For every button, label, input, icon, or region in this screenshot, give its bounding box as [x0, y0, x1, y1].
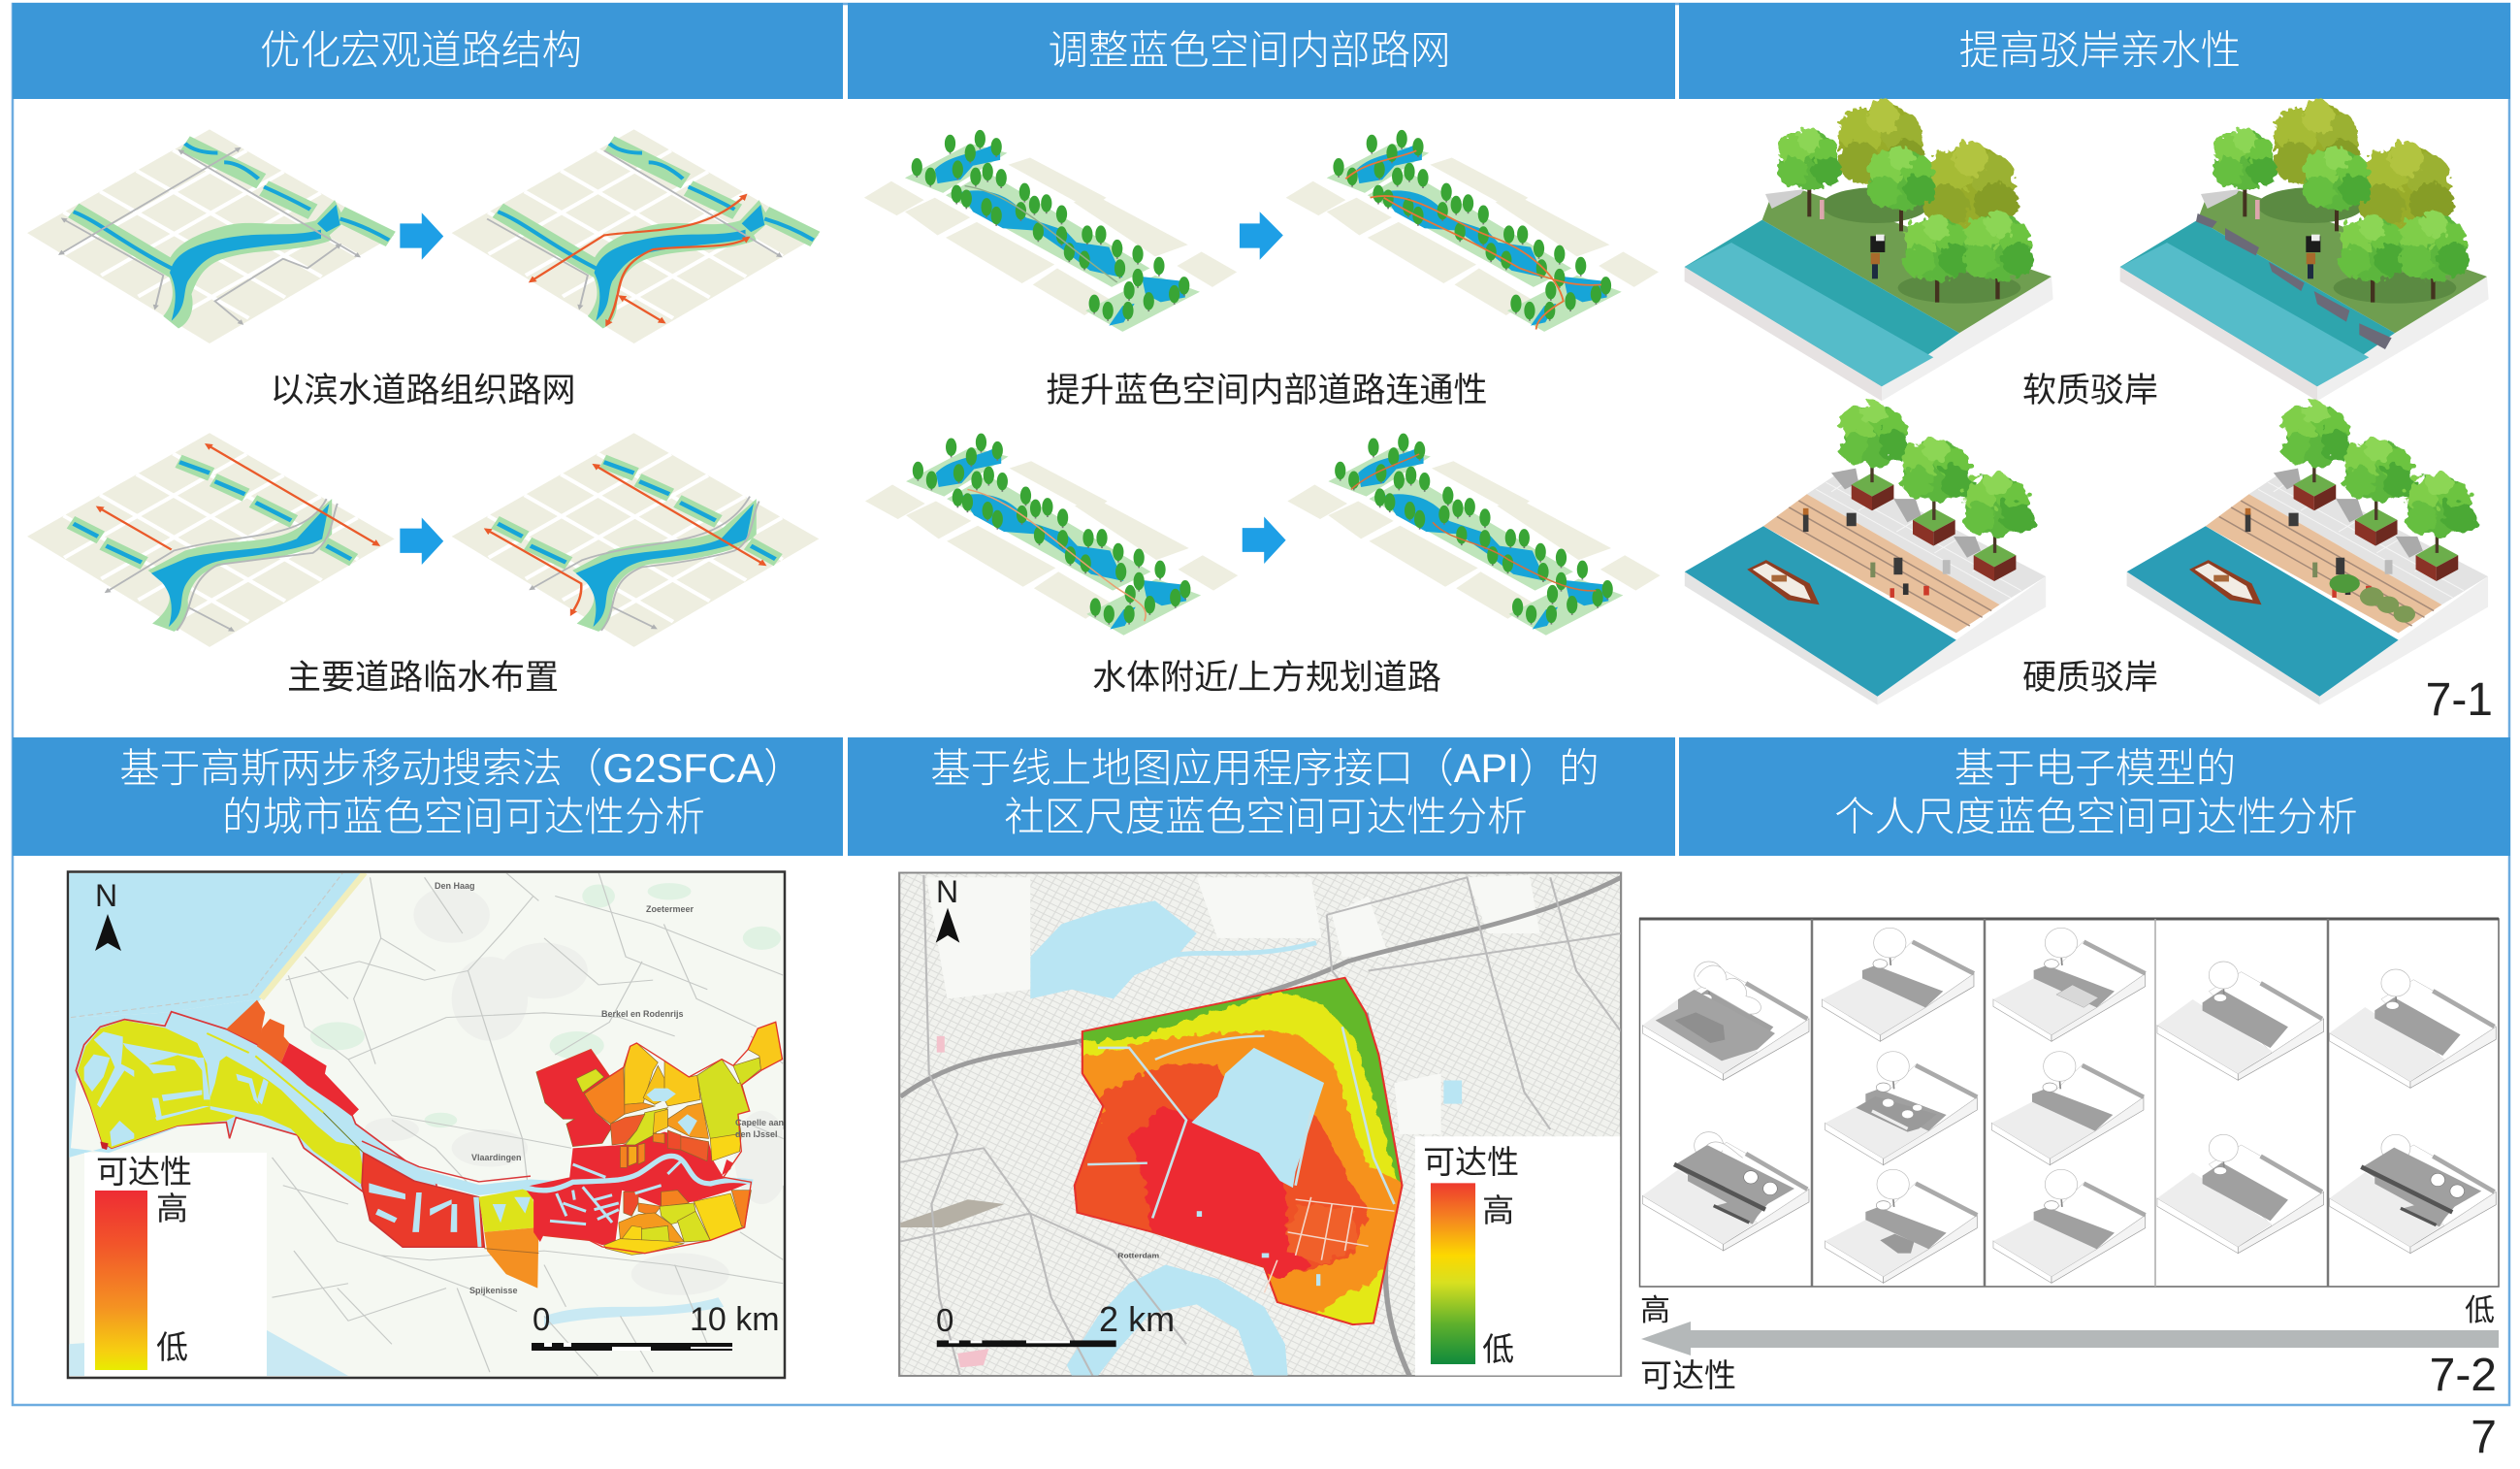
header: 高斯两步移动搜索法: 的城市蓝色空间可达性分析: [222, 794, 705, 839]
legend: accessibility: [84, 1153, 267, 1376]
map base: water and highways: [900, 875, 1621, 1377]
figure number 7-1: 7-1: [2426, 674, 2493, 726]
header: 线上地图应用程序接口: 基于线上地图应用程序接口（API）的: [930, 745, 1599, 791]
panel: personal scale typologies: [1642, 928, 2496, 1283]
column 2 blocks: [1822, 928, 1977, 1283]
arrow: [1243, 517, 1286, 564]
legend: accessibility: 可达性: [1423, 1144, 1519, 1180]
label: low: 低: [2465, 1293, 2495, 1327]
diagram: soft bank before: [1685, 99, 2053, 401]
header: 优化宏观道路结构: [13, 3, 843, 99]
legend: accessibility: 高: [156, 1191, 188, 1226]
north arrow: [95, 878, 121, 951]
legend: accessibility: 低: [1482, 1331, 1514, 1367]
scale bar: 0: [533, 1301, 550, 1337]
header: 优化宏观道路结构: 优化宏观道路结构: [260, 27, 582, 73]
map: city scale accessibility: [68, 871, 789, 1378]
map labels: Spijkenisse: [469, 1286, 518, 1295]
arrow: [400, 212, 443, 260]
arrow: accessibility direction: [1641, 1322, 2499, 1355]
diagram: park connectivity after: [1286, 130, 1659, 332]
north arrow: N: [95, 878, 117, 913]
north arrow: N: [936, 874, 958, 909]
region outline, lake and canals: [1075, 978, 1402, 1324]
caption: 水体附近/上方规划道路: [1092, 659, 1441, 697]
label: high: 高: [1640, 1293, 1670, 1327]
scale bar: 0: [936, 1302, 953, 1338]
legend: accessibility: 低: [156, 1329, 188, 1365]
column 5 blocks: [2330, 969, 2496, 1254]
arrow: [1240, 212, 1283, 260]
label: accessibility: 可达性: [1640, 1357, 1736, 1393]
header: 电子模型: [1679, 737, 2510, 856]
header: 提高驳岸亲水性: [1679, 3, 2510, 99]
header: 高斯两步移动搜索法: [13, 737, 843, 856]
map labels: Zoetermeer: [646, 904, 695, 914]
map labels: den IJssel: [735, 1129, 778, 1139]
column 3 blocks: [1991, 928, 2146, 1283]
map labels: Den Haag: [435, 881, 475, 891]
diagram: main road near water after: [452, 433, 819, 647]
caption: 主要道路临水布置: [287, 659, 559, 697]
header: 线上地图应用程序接口: 社区尺度蓝色空间可达性分析: [1004, 794, 1528, 839]
diagram: roads near water after: [1287, 434, 1661, 636]
caption: 硬质驳岸: [2022, 659, 2158, 697]
page number: 7: [2471, 1412, 2497, 1463]
accessibility zones: [1075, 979, 1401, 1323]
map labels: [435, 881, 784, 1295]
panel: road structure diagrams: [27, 129, 819, 697]
diagram: soft bank after: [2120, 99, 2489, 401]
panel: hard bank diagrams and captions: [1685, 372, 2488, 705]
figure number 7-2: 7-2: [2430, 1350, 2497, 1401]
map label: Rotterdam: [1117, 1252, 1159, 1259]
caption: 软质驳岸: [2022, 372, 2158, 409]
map labels: Berkel en Rodenrijs: [601, 1009, 684, 1019]
diagram: roads near water before: [865, 434, 1238, 636]
header: 提高驳岸亲水性: 提高驳岸亲水性: [1959, 27, 2241, 73]
scale bar: 2 km: [1099, 1299, 1175, 1339]
column 1 blocks: [1642, 962, 1809, 1251]
header: 电子模型: 基于电子模型的: [1955, 745, 2236, 791]
panel frame: personal scale typologies: [1639, 919, 2499, 1287]
caption: 提升蓝色空间内部道路连通性: [1046, 372, 1487, 409]
caption: 以滨水道路组织路网: [270, 372, 575, 409]
header: 调整蓝色空间内部路网: [848, 3, 1675, 99]
legend: accessibility: [1415, 1136, 1620, 1376]
diagram: hard bank after: [2127, 402, 2488, 705]
scale bar: [936, 1299, 1175, 1347]
map base: water and roads: [69, 872, 789, 1377]
scale bar: 10 km: [690, 1301, 780, 1338]
map labels: Capelle aan: [735, 1118, 784, 1127]
header: 线上地图应用程序接口: [848, 737, 1675, 856]
region: central port: [362, 1141, 565, 1289]
scale bar: [532, 1301, 780, 1351]
header: 电子模型: 个人尺度蓝色空间可达性分析: [1834, 794, 2358, 839]
diagram: park connectivity before: [864, 130, 1237, 332]
header: 调整蓝色空间内部路网: 调整蓝色空间内部路网: [1048, 27, 1451, 73]
region: Rotterdam centre and east: [524, 1022, 782, 1255]
panel: blue space internal road diagrams: [864, 130, 1661, 697]
diagram: waterfront road network before: [27, 129, 395, 343]
legend: accessibility: 可达性: [96, 1154, 192, 1190]
diagram: main road near water before: [27, 433, 395, 647]
arrow: [400, 518, 443, 565]
region: western port and north bank: [76, 1000, 436, 1193]
north arrow: [936, 874, 959, 943]
column 4 blocks: [2157, 962, 2324, 1254]
diagram: waterfront road network after: [452, 129, 819, 343]
header: 高斯两步移动搜索法: 基于高斯两步移动搜索法（G2SFCA）: [119, 745, 804, 791]
map: community scale accessibility: [899, 872, 1621, 1377]
map labels: Vlaardingen: [471, 1153, 522, 1162]
legend: accessibility: 高: [1482, 1192, 1514, 1228]
diagram: hard bank before: [1685, 402, 2046, 705]
